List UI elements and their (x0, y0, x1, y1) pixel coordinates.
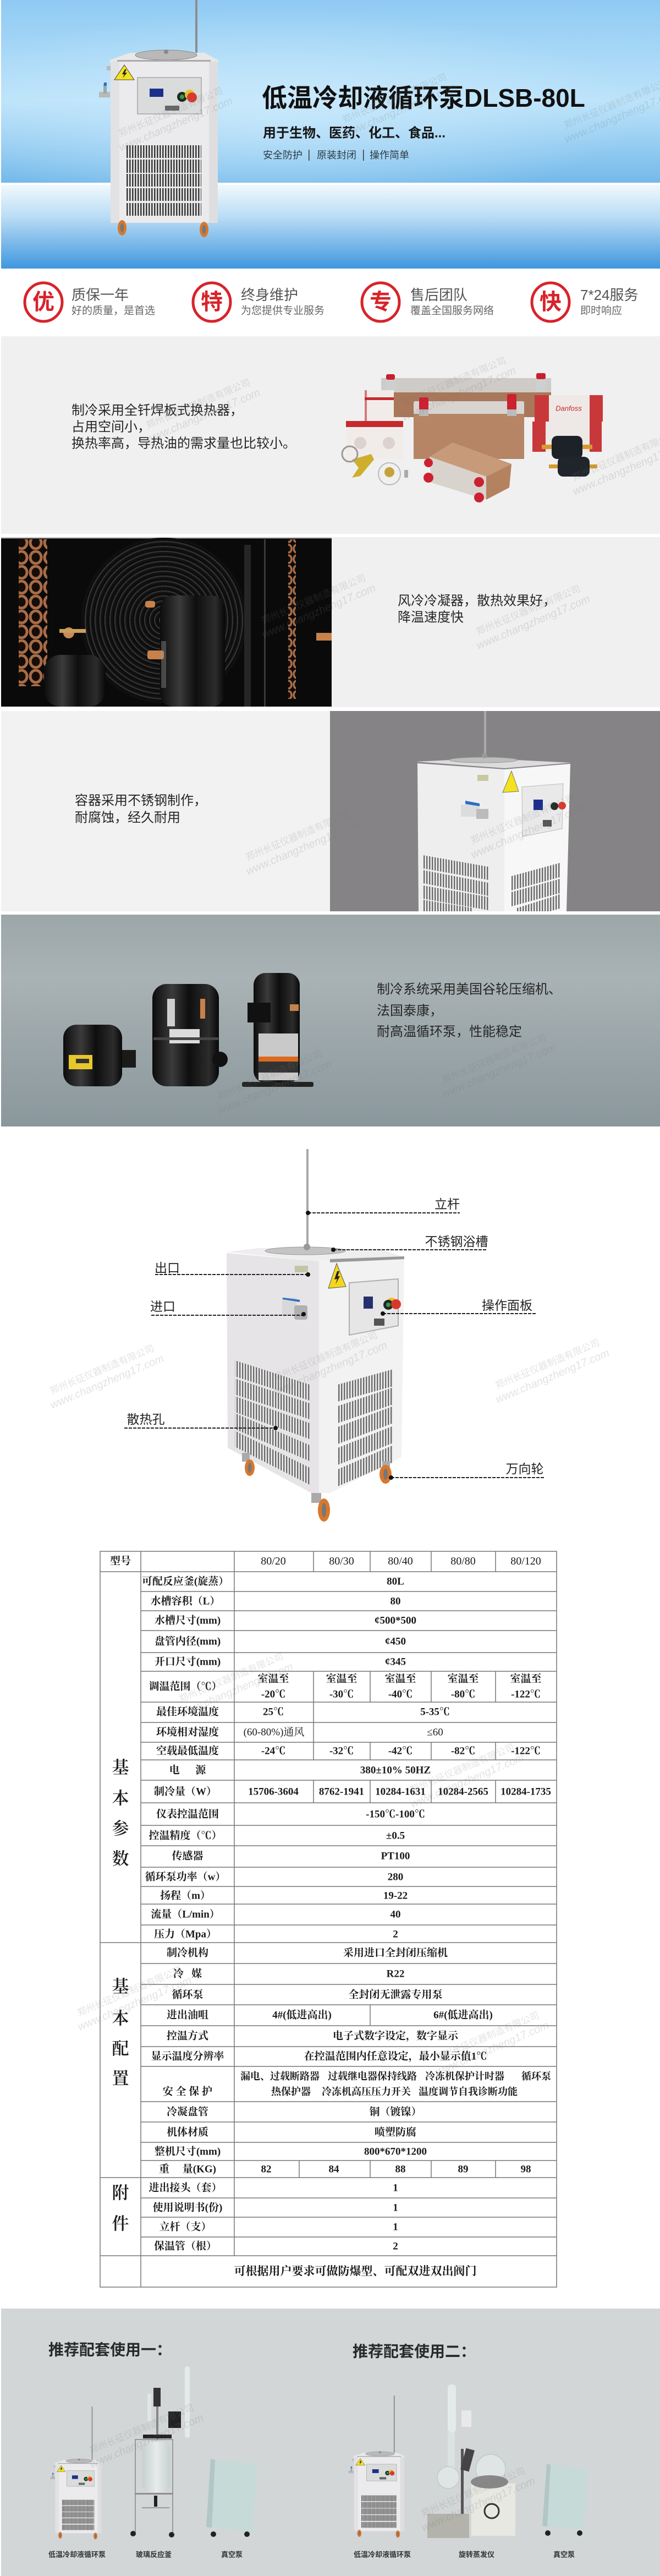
setup two heading: 推荐配套使用二： (353, 2343, 476, 2360)
table rows: basic configuration: 过载继电器保持线路 (328, 2071, 417, 2082)
table rows: basic configuration: 84 (329, 2164, 339, 2175)
callout: inlet (150, 1299, 306, 1316)
service: 24-hour: 7*24服务 (580, 287, 638, 303)
compressors photo (63, 973, 314, 1087)
watermarks: 郑州长征仪器制造有限公司 (441, 1032, 548, 1086)
table rows: basic parameters: 10284-1735 (501, 1786, 551, 1797)
service: after-sales team (362, 283, 494, 321)
watermarks: www.changzheng17.com (88, 2411, 205, 2471)
heat exchanger text (72, 403, 296, 451)
setup captions: 真空泵 (221, 2550, 243, 2559)
setup captions (48, 2550, 575, 2559)
condenser text (398, 593, 556, 625)
table rows: basic parameters: ¢450 (385, 1636, 406, 1648)
watermarks: www.changzheng17.com (469, 802, 586, 861)
heat exchanger parts photo: Danfoss (556, 404, 582, 413)
watermarks: 郑州长征仪器制造有限公司 (400, 355, 508, 409)
heat exchanger text: 制冷采用全钎焊板式换热器， (72, 403, 243, 418)
table rows: basic parameters: 室温至 (257, 1672, 289, 1685)
callout: control panel (381, 1298, 536, 1316)
table rows: basic parameters: 控温精度（℃） (148, 1829, 222, 1841)
hero feature tags: 原装封闭 (317, 150, 356, 161)
watermarks: www.changzheng17.com (433, 2019, 551, 2079)
compressors text (377, 982, 562, 1039)
service: after-sales team: 专 (370, 290, 392, 314)
panel: heat exchanger (1, 336, 660, 534)
heat exchanger parts photo (342, 373, 603, 502)
watermarks: www.changzheng17.com (420, 2475, 537, 2534)
table rows: accessories: 使用说明书(份) (153, 2201, 222, 2213)
table rows: basic parameters: 扬程（m） (160, 1889, 211, 1902)
callout: control panel: 操作面板 (482, 1298, 532, 1312)
table rows: accessories: 2 (393, 2241, 398, 2252)
table rows: accessories: 1 (393, 2183, 398, 2194)
product photo: cooling pump (99, 0, 219, 237)
table rows: basic configuration: 89 (458, 2164, 469, 2175)
table rows: basic parameters: 水槽尺寸(mm) (155, 1615, 221, 1627)
watermarks: 郑州长征仪器制造有限公司 (178, 1651, 285, 1705)
table rows: basic configuration: R22 (387, 1968, 404, 1980)
service: warranty (25, 283, 155, 321)
watermarks: www.changzheng17.com (76, 1974, 193, 2033)
table rows: basic parameters: -80℃ (451, 1688, 475, 1700)
condenser photo (1, 538, 332, 707)
table rows: basic parameters: 2 (393, 1928, 398, 1940)
table rows: basic parameters: 8762-1941 (319, 1786, 364, 1797)
watermarks: www.changzheng17.com (272, 1339, 389, 1398)
watermarks: www.changzheng17.com (341, 81, 458, 140)
table rows: basic configuration: 漏电、过载断路器 (240, 2070, 320, 2082)
table header row: 80/20 (261, 1555, 286, 1567)
table rows: basic configuration: 6#(低进高出) (433, 2009, 493, 2021)
setup captions: 真空泵 (553, 2550, 575, 2559)
service: 24-hour (532, 283, 638, 321)
table header row: 80/40 (388, 1555, 413, 1567)
service: warranty: 质保一年 (72, 287, 129, 303)
table rows: basic parameters: 室温至 (510, 1672, 542, 1685)
table header row: 80/80 (450, 1555, 476, 1567)
vessel text: 耐腐蚀，经久耐用 (75, 810, 180, 825)
annotated product diagram (124, 1149, 544, 1522)
callout: vent holes: 散热孔 (127, 1412, 165, 1426)
table rows: basic configuration: 冷冻机高压压力开关 (322, 2086, 411, 2097)
group heading: basic configuration (112, 1977, 129, 2088)
table rows: basic parameters: 开口尺寸(mm) (155, 1655, 221, 1667)
group heading: basic parameters: 本 (112, 1789, 129, 1808)
table rows: basic parameters: 5-35℃ (420, 1706, 450, 1718)
watermarks: 郑州长征仪器制造有限公司 (341, 72, 448, 125)
vessel text: 容器采用不锈钢制作， (75, 794, 207, 808)
table rows: basic configuration (151, 1946, 551, 2175)
table rows: basic configuration: 循环泵 (172, 1989, 204, 2001)
table footer note: 可根据用户要求可做防爆型、可配双进双出阀门 (234, 2265, 476, 2278)
service: warranty: 好的质量，是首选 (72, 305, 155, 317)
table rows: basic parameters: -122℃ (511, 1688, 541, 1700)
table rows: basic parameters: ±0.5 (386, 1830, 405, 1841)
watermarks: www.changzheng17.com (409, 1751, 526, 1811)
table rows: accessories: 进出接头（套） (148, 2181, 222, 2194)
table rows: basic parameters: 制冷量（W） (154, 1785, 217, 1797)
watermarks: 郑州长征仪器制造有限公司 (145, 377, 252, 431)
table rows: basic parameters: PT100 (381, 1850, 410, 1862)
table rows: basic parameters: 盘管内径(mm) (155, 1636, 221, 1648)
table header row (110, 1555, 541, 1567)
hero feature tags: 安全防护 (263, 150, 302, 161)
table rows: basic parameters: -40℃ (388, 1688, 413, 1700)
table rows: basic parameters: -30℃ (329, 1688, 354, 1700)
callout: rod (306, 1197, 460, 1215)
compressors text: 耐高温循环泵，性能稳定 (377, 1025, 522, 1039)
table header row: 80/30 (329, 1555, 354, 1567)
setup one: cooling pump (50, 2407, 102, 2539)
panel: air-cooled condenser (1, 537, 660, 707)
watermarks: 郑州长征仪器制造有限公司 (475, 583, 582, 637)
table rows: basic parameters: -24℃ (261, 1746, 285, 1757)
table rows: basic configuration: 冷冻机保护计时器 (425, 2070, 504, 2082)
table rows: basic parameters: -20℃ (261, 1688, 285, 1700)
table rows: basic parameters: 电 源 (169, 1764, 206, 1776)
panel: stainless steel vessel (1, 711, 660, 911)
hero subtitle: 用于生物、医药、化工、食品... (263, 125, 446, 141)
setup captions: 旋转蒸发仪 (459, 2550, 494, 2559)
group heading: basic configuration: 本 (112, 2009, 129, 2028)
table rows: accessories (148, 2181, 398, 2252)
hero title: 低温冷却液循环泵DLSB-80L (262, 84, 585, 112)
table rows: basic parameters: 80 (391, 1596, 400, 1607)
callout: rod: 立杆 (435, 1197, 460, 1211)
callout: caster: 万向轮 (506, 1462, 543, 1476)
group heading: basic configuration: 配 (112, 2039, 129, 2058)
table rows: basic configuration: 整机尺寸(mm) (155, 2145, 221, 2157)
table rows: basic parameters (142, 1575, 551, 1940)
compressors text: 法国泰康， (377, 1004, 443, 1018)
group heading: basic parameters: 数 (112, 1849, 129, 1869)
setup two: vacuum pump (542, 2464, 588, 2536)
hero feature tags (263, 150, 409, 161)
table rows: basic parameters: -150℃-100℃ (366, 1808, 425, 1820)
hero banner (1, 0, 660, 269)
service: warranty: 优 (32, 290, 54, 314)
table rows: basic parameters: 水槽容积（L） (151, 1595, 220, 1607)
watermarks: 郑州长征仪器制造有限公司 (469, 792, 576, 846)
service: maintenance (193, 283, 324, 321)
callout: stainless bath (331, 1234, 488, 1252)
callout: vent holes (124, 1412, 278, 1430)
table rows: basic parameters: 10284-1631 (375, 1786, 426, 1797)
group heading: accessories (112, 2184, 129, 2233)
watermarks: 郑州长征仪器制造有限公司 (420, 2465, 527, 2519)
table rows: basic parameters: 空载最低温度 (156, 1744, 219, 1757)
table rows: basic configuration: 铜（镀镍） (369, 2105, 422, 2118)
watermarks: 郑州长征仪器制造有限公司 (272, 1330, 379, 1383)
callout: inlet: 进口 (150, 1299, 175, 1314)
table rows: basic configuration: 88 (395, 2164, 406, 2175)
table rows: basic parameters: -82℃ (451, 1746, 475, 1757)
watermarks: 郑州长征仪器制造有限公司 (409, 1742, 516, 1796)
table rows: basic configuration: 重 量(KG) (159, 2163, 216, 2175)
setup two: cooling pump (349, 2395, 405, 2537)
table rows: basic configuration: 进出油咀 (167, 2009, 208, 2021)
watermarks: www.changzheng17.com (145, 386, 262, 446)
table rows: basic parameters: 室温至 (384, 1672, 416, 1685)
table rows: accessories: 1 (393, 2202, 398, 2213)
table rows: basic configuration: 采用进口全封闭压缩机 (343, 1947, 448, 1959)
table rows: basic parameters: 传感器 (172, 1849, 204, 1862)
service: maintenance: 为您提供专业服务 (241, 305, 324, 317)
watermarks: 郑州长征仪器制造有限公司 (494, 1337, 601, 1391)
table rows: basic configuration: 800*670*1200 (364, 2146, 427, 2157)
table rows: basic configuration: 显示温度分辨率 (151, 2049, 224, 2063)
service: 24-hour: 快 (540, 290, 562, 314)
machine 3/4 view (227, 1149, 404, 1522)
table rows: basic configuration: 热保护器 (271, 2086, 311, 2097)
setup captions: 低温冷却液循环泵 (48, 2550, 106, 2559)
watermarks: www.changzheng17.com (216, 1058, 333, 1117)
table rows: basic configuration: 机体材质 (167, 2126, 208, 2139)
table rows: basic parameters: 仪表控温范围 (156, 1808, 219, 1820)
setup captions: 玻璃反应釜 (136, 2550, 172, 2559)
callout: outlet (155, 1261, 310, 1277)
table header row: 型号 (110, 1555, 131, 1567)
setup one: glass reactor (130, 2366, 190, 2537)
callout: outlet: 出口 (155, 1261, 180, 1275)
table rows: basic parameters: 循环泵功率（w） (145, 1871, 226, 1883)
watermarks: 郑州长征仪器制造有限公司 (216, 1048, 323, 1102)
group heading: basic parameters: 参 (112, 1819, 129, 1838)
table rows: basic parameters: ≤60 (427, 1727, 443, 1738)
watermarks: 郑州长征仪器制造有限公司 (244, 809, 351, 863)
table header row: 80/120 (510, 1555, 541, 1567)
table rows: basic parameters: (60-80%)通风 (244, 1726, 304, 1738)
table rows: basic configuration: 在控温范围内任意设定，最小显示值1℃ (304, 2049, 487, 2063)
watermarks: www.changzheng17.com (48, 1352, 166, 1412)
table rows: basic configuration: 安 全 保 护 (163, 2085, 212, 2098)
table rows: basic configuration: 冷凝盘管 (167, 2105, 208, 2118)
group heading: accessories: 件 (112, 2214, 129, 2233)
watermarks: 郑州长征仪器制造有限公司 (433, 2010, 541, 2064)
callout: stainless bath: 不锈钢浴槽 (425, 1234, 488, 1249)
table rows: basic parameters: ¢500*500 (375, 1615, 416, 1627)
setup captions: 低温冷却液循环泵 (354, 2550, 411, 2559)
table rows: basic parameters: 可配反应釜(旋蒸） (142, 1575, 229, 1587)
service: maintenance: 特 (201, 290, 223, 314)
table rows: basic configuration: 冷 媒 (173, 1967, 202, 1980)
watermarks: 郑州长征仪器制造有限公司 (48, 1343, 156, 1397)
table rows: basic parameters: ¢345 (385, 1656, 406, 1667)
table rows: basic parameters: 10284-2565 (438, 1786, 488, 1797)
heat exchanger text: 换热率高，导热油的需求量也比较小。 (72, 436, 296, 451)
table rows: basic configuration: 循环泵 (521, 2071, 551, 2082)
watermarks: www.changzheng17.com (260, 582, 377, 641)
table rows: basic configuration: 98 (520, 2164, 531, 2175)
watermarks: www.changzheng17.com (494, 1347, 611, 1406)
table rows: basic parameters: 80L (387, 1576, 404, 1587)
setup one: vacuum pump (206, 2459, 257, 2537)
setup one heading: 推荐配套使用一： (48, 2341, 172, 2359)
watermarks: 郑州长征仪器制造有限公司 (88, 2402, 195, 2456)
table rows: basic parameters: -122℃ (511, 1746, 541, 1757)
condenser text: 风冷冷凝器，散热效果好， (398, 593, 556, 609)
watermarks: 郑州长征仪器制造有限公司 (260, 572, 367, 626)
hero feature tags: 操作简单 (370, 150, 409, 161)
group heading: basic configuration: 置 (112, 2069, 129, 2088)
table rows: basic parameters: -42℃ (388, 1746, 413, 1757)
vessel text (75, 794, 207, 825)
service: 24-hour: 即时响应 (580, 305, 622, 317)
table rows: basic parameters: -32℃ (329, 1746, 354, 1757)
panel: recommended setups (1, 2309, 660, 2576)
watermarks: www.changzheng17.com (178, 1660, 295, 1720)
table rows: basic configuration: 全封闭无泄露专用泵 (348, 1988, 443, 2001)
table rows: basic parameters: 室温至 (326, 1672, 358, 1685)
table rows: basic configuration: 82 (261, 2164, 272, 2175)
service: after-sales team: 覆盖全国服务网络 (410, 305, 494, 317)
table rows: basic configuration: 制冷机构 (167, 1946, 208, 1959)
table rows: basic parameters: 最佳环境温度 (156, 1705, 219, 1718)
group heading: basic parameters (112, 1758, 129, 1869)
table rows: basic parameters: 压力（Mpa） (154, 1928, 217, 1940)
compressors text: 制冷系统采用美国谷轮压缩机、 (377, 982, 562, 997)
table rows: basic configuration: 温度调节自我诊断功能 (419, 2086, 518, 2097)
setup two: rotary evaporator (427, 2384, 515, 2538)
group heading: basic configuration: 基 (112, 1977, 129, 1997)
callout: caster (389, 1462, 544, 1480)
condenser text: 降温速度快 (398, 610, 464, 625)
watermarks: www.changzheng17.com (441, 1041, 558, 1101)
watermarks: www.changzheng17.com (400, 364, 518, 424)
table rows: basic configuration: 喷塑防腐 (375, 2126, 416, 2139)
table rows: accessories: 保温管（根） (154, 2240, 217, 2252)
table rows: basic parameters: 15706-3604 (248, 1786, 299, 1797)
table rows: accessories: 立杆（支） (159, 2221, 212, 2233)
table rows: basic parameters: 调温范围（℃） (148, 1681, 222, 1693)
table rows: basic parameters: 室温至 (447, 1672, 479, 1685)
table rows: basic configuration: 控温方式 (167, 2030, 208, 2042)
specification table (100, 1551, 557, 2287)
table grid (100, 1551, 557, 2287)
table rows: basic parameters: 流量（L/min） (151, 1908, 220, 1921)
group heading: basic parameters: 基 (112, 1758, 129, 1778)
service guarantees row (25, 283, 638, 321)
table rows: accessories: 1 (393, 2221, 398, 2233)
table rows: basic parameters: 40 (391, 1908, 400, 1921)
heat exchanger text: 占用空间小， (72, 419, 151, 435)
table rows: basic configuration: 4#(低进高出) (272, 2009, 332, 2021)
panel: compressors (1, 915, 660, 1126)
table rows: basic parameters: 25℃ (263, 1706, 284, 1718)
table rows: basic configuration: 电子式数字设定，数字显示 (333, 2030, 459, 2042)
table rows: basic parameters: 环境相对湿度 (156, 1726, 219, 1738)
table rows: basic parameters: 19-22 (383, 1890, 408, 1902)
group heading: accessories: 附 (112, 2184, 129, 2202)
watermarks: 郑州长征仪器制造有限公司 (117, 85, 224, 139)
machine close-up photo (416, 711, 571, 911)
watermarks: www.changzheng17.com (244, 818, 361, 878)
table rows: basic parameters: 280 (388, 1871, 403, 1883)
service: after-sales team: 售后团队 (410, 287, 468, 303)
watermarks: www.changzheng17.com (475, 593, 592, 652)
watermarks: www.changzheng17.com (117, 95, 234, 154)
service: maintenance: 终身维护 (241, 287, 298, 303)
watermarks: 郑州长征仪器制造有限公司 (76, 1965, 183, 2019)
table rows: basic parameters: 380±10% 50HZ (360, 1764, 431, 1776)
